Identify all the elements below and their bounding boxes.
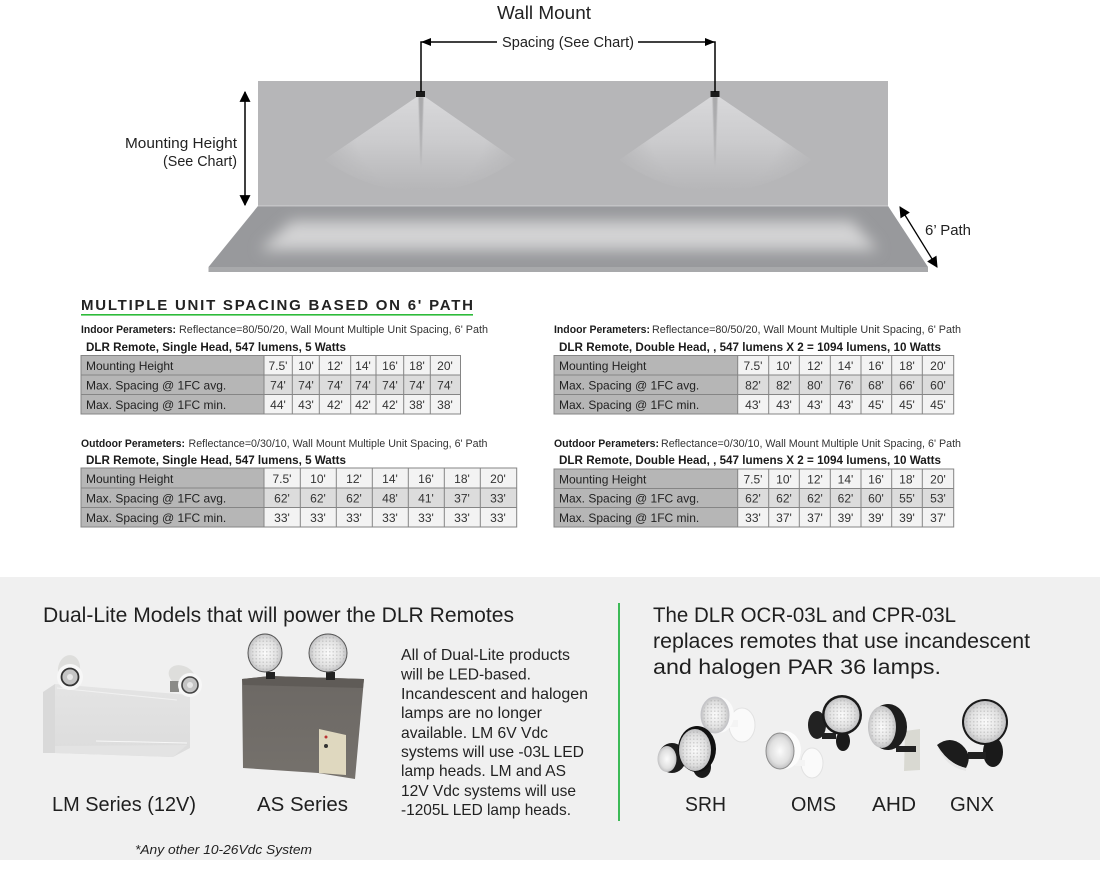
text: indoor parameters left: Reflectance=80/50/20, Wall Mount Multiple Unit Spacing, 6' Path	[179, 324, 488, 336]
heading: Dual-Lite models: Dual-Lite Models that will power the DLR Remotes	[43, 604, 514, 627]
icon: OMS lamps	[766, 695, 862, 778]
table: outdoor double head: 55'	[899, 492, 915, 506]
table: outdoor single head: 33'	[418, 511, 434, 525]
arrow: 6 foot path	[900, 207, 937, 267]
table: indoor double head: 43'	[807, 398, 823, 412]
table: outdoor double head: 20'	[930, 472, 946, 486]
table: indoor single head: 74'	[270, 378, 286, 392]
table: indoor single head: 42'	[355, 398, 371, 412]
table: indoor single head: Mounting Height	[86, 359, 174, 373]
table: indoor double head: 68'	[868, 378, 884, 392]
icon: GNX lamp	[937, 699, 1008, 771]
table: outdoor single head: 33'	[274, 511, 290, 525]
text: LED explanation	[400, 647, 588, 819]
table: outdoor single head: 7.5'	[273, 472, 291, 486]
table: indoor single head: 42'	[382, 398, 398, 412]
table: outdoor double head: 62'	[807, 492, 823, 506]
text: LED explanation: available. LM 6V Vdc	[401, 725, 548, 742]
text: LED explanation: lamp heads. LM and AS	[401, 763, 566, 780]
table: outdoor single head: 33'	[346, 511, 362, 525]
table: indoor single head: 74'	[382, 378, 398, 392]
table: outdoor double head: 60'	[868, 492, 884, 506]
table: outdoor single head: 33'	[310, 511, 326, 525]
text: outdoor parameters right: Outdoor Perameters:	[554, 438, 659, 450]
table: outdoor double head: 10'	[776, 472, 792, 486]
divider: green	[618, 603, 620, 821]
table: indoor double head: 18'	[899, 359, 915, 373]
text: outdoor parameters left: Reflectance=0/30/10, Wall Mount Multiple Unit Spacing, 6' Path	[188, 438, 488, 450]
table: indoor single head: Max. Spacing @ 1FC avg.	[86, 378, 226, 392]
footnote: *Any other 10-26Vdc System	[135, 842, 312, 857]
table: outdoor single head: 33'	[382, 511, 398, 525]
text: LED explanation: lamps are no longer	[401, 705, 543, 722]
label: mounting height	[125, 136, 237, 170]
table: indoor single head: 12'	[327, 359, 343, 373]
table heading: outdoor double head: DLR Remote, Double Head, , 547 lumens X 2 = 1094 lumens, 10 Watts	[559, 455, 941, 467]
table: indoor double head: 60'	[930, 378, 946, 392]
table: indoor double head: 10'	[776, 359, 792, 373]
table: outdoor single head: Mounting Height	[86, 472, 174, 486]
table: indoor single head: 38'	[409, 398, 425, 412]
table: outdoor single head: 48'	[382, 492, 398, 506]
table: outdoor single head: 18'	[454, 472, 470, 486]
table: indoor single head: 18'	[409, 359, 425, 373]
table: indoor double head: 45'	[930, 398, 946, 412]
table: indoor single head: 16'	[382, 359, 398, 373]
text: LED explanation: 12V Vdc systems will use	[401, 783, 576, 800]
heading: replacement statement: and halogen PAR 36 lamps.	[653, 656, 941, 679]
label: OMS: OMS	[791, 794, 836, 816]
table: indoor double head	[554, 356, 954, 414]
table: indoor double head: 66'	[899, 378, 915, 392]
table: outdoor single head	[81, 468, 517, 527]
wall	[258, 81, 888, 206]
table: indoor single head: 43'	[298, 398, 314, 412]
table: outdoor double head: 33'	[745, 511, 761, 525]
label: GNX: GNX	[950, 794, 994, 816]
table: indoor double head: 82'	[745, 378, 761, 392]
table: outdoor double head: 18'	[899, 472, 915, 486]
light cone right	[632, 97, 798, 174]
table: outdoor single head: 20'	[490, 472, 506, 486]
table: outdoor double head: 53'	[930, 492, 946, 506]
table: indoor double head: 14'	[838, 359, 853, 373]
table heading: indoor double head: DLR Remote, Double Head, , 547 lumens X 2 = 1094 lumens, 10 Watts	[559, 342, 941, 354]
text: LED explanation: will be LED-based.	[400, 666, 531, 684]
table: indoor double head: 7.5'	[744, 359, 762, 373]
table: outdoor double head: 62'	[745, 492, 761, 506]
table: outdoor single head: 62'	[346, 492, 362, 506]
label: AHD: AHD	[872, 794, 916, 816]
light cone left	[338, 97, 504, 174]
text: LED explanation: systems will use -03L LED	[401, 744, 584, 761]
table: indoor single head: 44'	[270, 398, 286, 412]
diagram: wall mount lighting	[208, 81, 928, 272]
table: indoor double head: Mounting Height	[559, 359, 647, 373]
table: indoor single head: 14'	[355, 359, 371, 373]
table: indoor single head: 74'	[327, 378, 343, 392]
panel: bottom products	[0, 577, 1100, 860]
table: outdoor double head: Max. Spacing @ 1FC avg.	[559, 492, 699, 506]
table: indoor single head	[81, 356, 460, 414]
table: indoor double head: 45'	[868, 398, 884, 412]
table: outdoor double head: 62'	[838, 492, 853, 506]
text: LED explanation: Incandescent and halogen	[401, 686, 588, 703]
table: indoor double head: 12'	[807, 359, 823, 373]
table: outdoor single head: 12'	[346, 472, 362, 486]
table: outdoor single head: 37'	[454, 492, 470, 506]
icon: AS Series unit	[242, 634, 364, 779]
table: outdoor single head: 33'	[490, 511, 506, 525]
table: outdoor double head: 37'	[807, 511, 823, 525]
label: spacing: Spacing (See Chart)	[502, 35, 634, 51]
heading: multiple unit spacing: MULTIPLE UNIT SPACING BASED ON 6' PATH	[81, 297, 473, 314]
table: indoor double head: Max. Spacing @ 1FC avg.	[559, 378, 699, 392]
table: outdoor double head: 39'	[899, 511, 915, 525]
text: indoor parameters left: Indoor Perameters:	[81, 324, 176, 336]
text: LED explanation: -1205L LED lamp heads.	[401, 802, 571, 819]
table: outdoor single head: 14'	[382, 472, 398, 486]
icon: SRH lamps	[658, 697, 755, 778]
table: outdoor double head: 12'	[807, 472, 823, 486]
text: indoor parameters right: Indoor Perameters:	[554, 324, 650, 336]
table: outdoor double head: 16'	[868, 472, 884, 486]
table: indoor double head: 43'	[745, 398, 761, 412]
heading: replacement statement: The DLR OCR-03L and CPR-03L	[653, 604, 956, 627]
text: LED explanation: All of Dual-Lite products	[401, 647, 570, 664]
text: indoor parameters right: Reflectance=80/50/20, Wall Mount Multiple Unit Spacing, 6' Path	[652, 324, 961, 336]
table: indoor single head: 38'	[437, 398, 453, 412]
table: indoor double head: 80'	[807, 378, 823, 392]
table: outdoor single head: 62'	[310, 492, 326, 506]
heading: replacement statement: replaces remotes that use incandescent	[653, 630, 1030, 653]
table: outdoor double head: 37'	[776, 511, 792, 525]
table: outdoor double head: 14'	[838, 472, 853, 486]
table: outdoor single head: Max. Spacing @ 1FC avg.	[86, 492, 226, 506]
table: indoor single head: 74'	[355, 378, 371, 392]
table: indoor double head: 43'	[838, 398, 853, 412]
fixture left	[416, 91, 425, 97]
table: indoor double head: 16'	[868, 359, 884, 373]
table: outdoor single head: 62'	[274, 492, 290, 506]
table: outdoor single head: 10'	[310, 472, 326, 486]
table: outdoor single head: 41'	[418, 492, 434, 506]
table: outdoor single head: 33'	[454, 511, 470, 525]
table: indoor single head: 74'	[437, 378, 453, 392]
heading: replacement statement	[653, 604, 1030, 679]
table: indoor single head: 7.5'	[269, 359, 287, 373]
table: indoor double head: 76'	[838, 378, 853, 392]
fixture right	[710, 91, 720, 97]
table: indoor double head: 82'	[776, 378, 792, 392]
table: indoor single head: 20'	[437, 359, 453, 373]
table heading: indoor single head: DLR Remote, Single Head, 547 lumens, 5 Watts	[86, 342, 346, 354]
table heading: outdoor single head: DLR Remote, Single Head, 547 lumens, 5 Watts	[86, 455, 346, 467]
arrow: spacing dimension	[421, 38, 715, 92]
text: outdoor parameters right: Reflectance=0/30/10, Wall Mount Multiple Unit Spacing, 6' Path	[661, 438, 961, 450]
table: indoor single head: 42'	[327, 398, 343, 412]
label: SRH: SRH	[685, 794, 726, 816]
icon: LM Series unit	[43, 653, 202, 757]
table: indoor single head: 74'	[409, 378, 425, 392]
table: indoor double head: Max. Spacing @ 1FC min.	[559, 398, 699, 412]
label: AS Series: AS Series	[257, 794, 348, 816]
table: outdoor double head: 39'	[838, 511, 853, 525]
table: indoor double head: 45'	[899, 398, 915, 412]
table: indoor single head: 74'	[298, 378, 314, 392]
label: LM Series: LM Series (12V)	[52, 794, 196, 816]
table: outdoor single head: Max. Spacing @ 1FC min.	[86, 511, 226, 525]
table: outdoor double head: Max. Spacing @ 1FC min.	[559, 511, 699, 525]
table: indoor double head: 20'	[930, 359, 946, 373]
icon: AHD lamp	[868, 704, 920, 771]
table: indoor single head: 10'	[298, 359, 314, 373]
label: 6 foot path: 6’ Path	[925, 223, 971, 239]
table: outdoor double head: 7.5'	[744, 472, 762, 486]
label: mounting height: Mounting Height	[125, 136, 237, 152]
table: indoor single head: Max. Spacing @ 1FC min.	[86, 398, 226, 412]
table: outdoor double head: 62'	[776, 492, 792, 506]
arrow: mounting height	[244, 92, 246, 205]
table: outdoor double head: 37'	[930, 511, 946, 525]
text: outdoor parameters left: Outdoor Perameters:	[81, 438, 185, 450]
table: outdoor single head: 16'	[418, 472, 434, 486]
title: Wall Mount: Wall Mount	[497, 3, 591, 23]
label: mounting height: (See Chart)	[163, 154, 237, 170]
table: outdoor single head: 33'	[490, 492, 506, 506]
table: indoor double head: 43'	[776, 398, 792, 412]
floor path	[208, 205, 928, 272]
table: outdoor double head: Mounting Height	[559, 472, 647, 486]
table: outdoor double head: 39'	[868, 511, 884, 525]
table: outdoor double head	[554, 469, 954, 527]
